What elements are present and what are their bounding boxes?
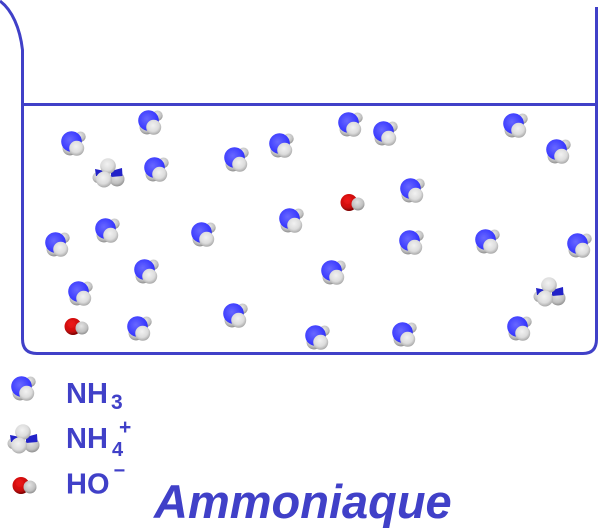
legend label: HO-: − bbox=[114, 460, 125, 482]
beaker outline bbox=[0, 1, 596, 354]
title: Ammoniaque bbox=[153, 475, 452, 528]
icon: HO- ion bbox=[12, 477, 36, 494]
ammonium ions in solution bbox=[92, 158, 566, 306]
legend label: HO-: HO bbox=[66, 468, 110, 500]
legend label: NH4+: 4 bbox=[112, 439, 124, 461]
legend label: NH4+: + bbox=[119, 416, 131, 439]
icon: NH4+ ion bbox=[8, 424, 40, 454]
legend label: NH3: NH bbox=[66, 378, 108, 410]
legend label: NH4+: NH bbox=[66, 423, 108, 455]
legend label: NH3: 3 bbox=[111, 391, 123, 414]
legend bbox=[8, 376, 131, 500]
liquid surface line bbox=[22, 103, 596, 106]
hydroxide ions in solution bbox=[64, 194, 364, 335]
ammonia molecules in solution bbox=[45, 110, 592, 350]
icon: NH3 molecule bbox=[11, 376, 36, 401]
